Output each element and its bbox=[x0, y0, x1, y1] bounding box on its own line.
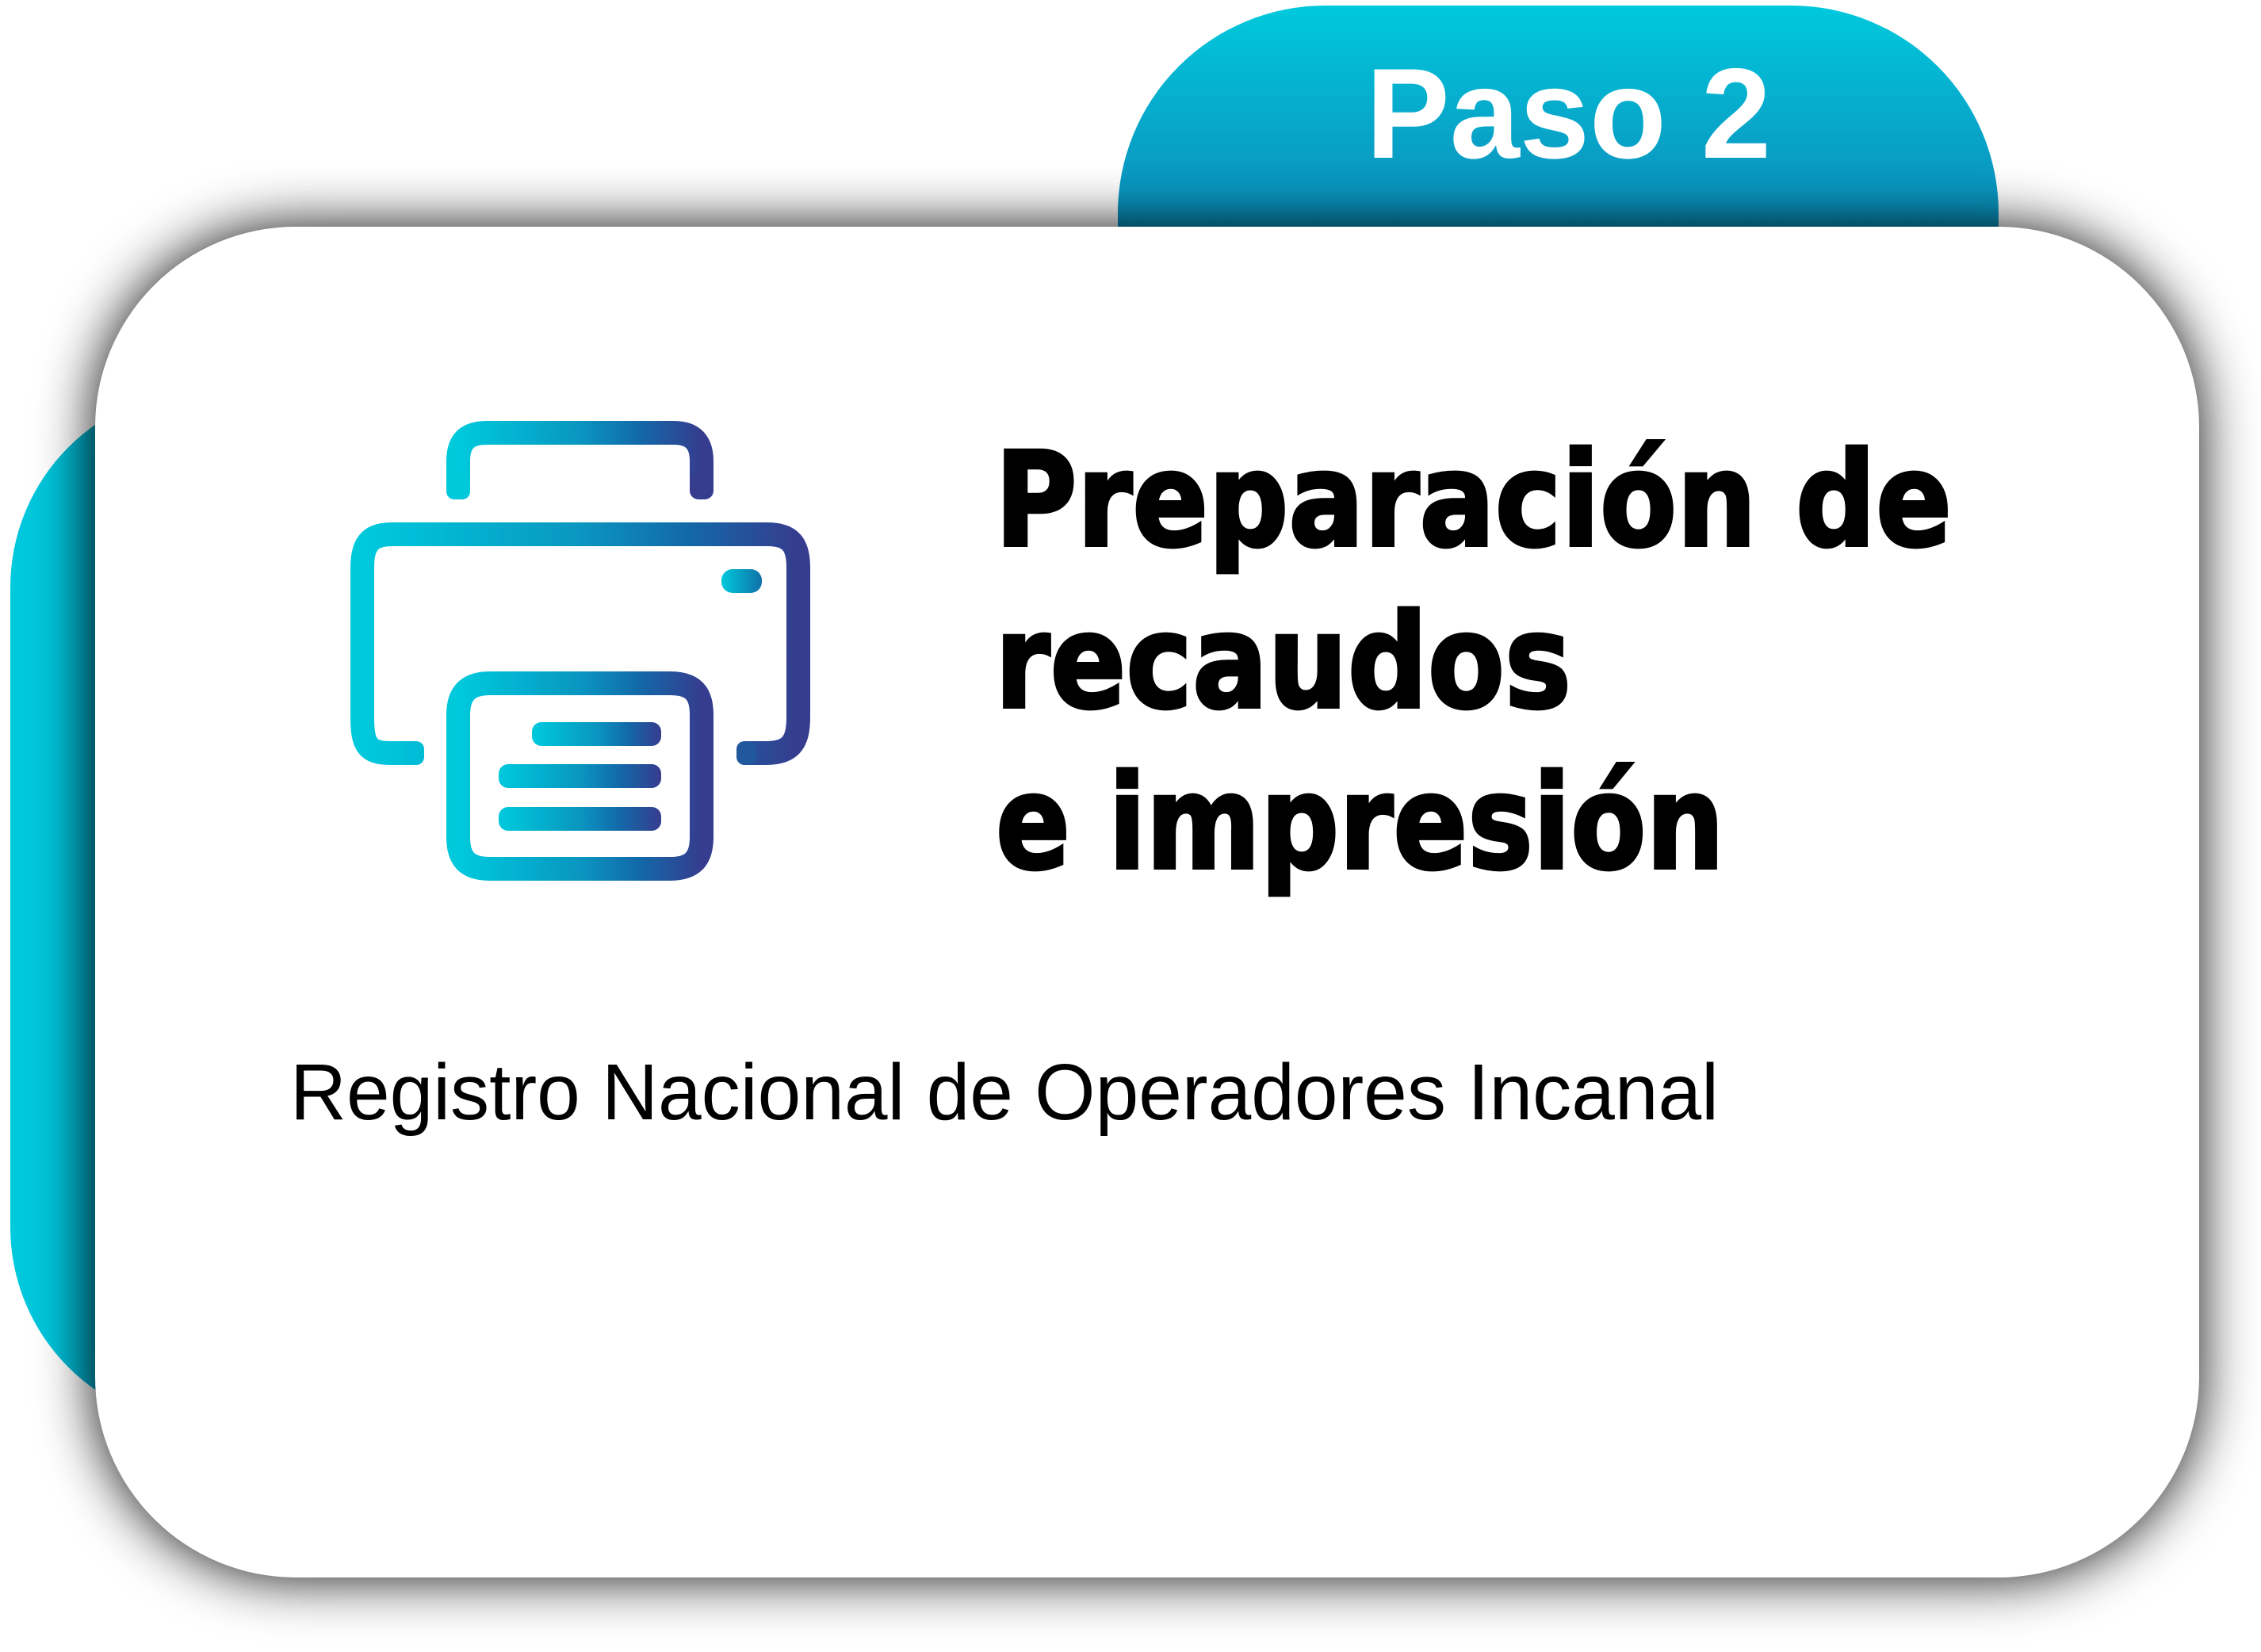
body right end bbox=[736, 741, 756, 765]
top tab: Paso 2 bbox=[1118, 6, 1999, 449]
tray right foot bbox=[690, 472, 713, 499]
heading bbox=[995, 424, 1952, 899]
paper text line 1 bbox=[532, 722, 661, 746]
control button bbox=[721, 569, 762, 593]
printer body bbox=[362, 534, 798, 753]
body left end bbox=[404, 741, 424, 765]
paper text line 2 bbox=[499, 764, 661, 788]
tab label: Paso 2 bbox=[1366, 42, 1771, 185]
paper sheet bbox=[458, 683, 702, 869]
panel: main white card bbox=[95, 227, 2199, 1577]
paper text line 3 bbox=[499, 807, 661, 831]
printer top tray bbox=[458, 433, 702, 480]
heading line 3: e impresión bbox=[996, 747, 1724, 899]
subtitle text: Registro Nacional de Operadores Incanal bbox=[290, 1048, 1719, 1137]
left teal tab behind card bbox=[10, 389, 565, 1425]
heading line 1: Preparación de bbox=[995, 424, 1952, 576]
heading line 2: recaudos bbox=[995, 586, 1571, 738]
tray left foot bbox=[446, 472, 470, 499]
icon: printer bbox=[362, 433, 798, 869]
